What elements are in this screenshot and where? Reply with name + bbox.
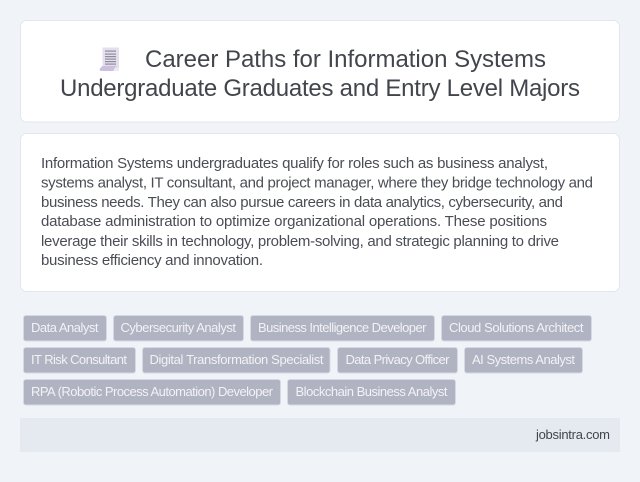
tag: Digital Transformation Specialist [142, 348, 330, 373]
tag: IT Risk Consultant: IT Risk Consultant [31, 352, 127, 367]
text block: description: business efficiency and innovation. [41, 252, 263, 269]
tag: Blockchain Business Analyst: Blockchain Business Analyst [296, 384, 448, 399]
icon: document scroll [100, 48, 119, 71]
tag: Data Analyst: Data Analyst [31, 320, 99, 335]
tag: Business Intelligence Developer [250, 316, 434, 341]
tag list [24, 316, 592, 405]
title: Undergraduate Graduates and Entry Level Majors [60, 75, 580, 102]
footer: jobsintra.com [535, 427, 610, 442]
tag: Cybersecurity Analyst [114, 316, 244, 341]
tag: Blockchain Business Analyst [288, 380, 456, 405]
tag: AI Systems Analyst: AI Systems Analyst [472, 352, 575, 367]
title: Career Paths for Information Systems [145, 46, 546, 73]
text block: description: systems analyst, IT consultant, and project manager, where they bridge technology and [41, 174, 593, 192]
panel: description [20, 134, 620, 292]
tag: RPA Developer: RPA (Robotic Process Automation) Developer [31, 384, 274, 399]
tag: Cloud Solutions Architect: Cloud Solutions Architect [449, 320, 584, 335]
tag: Data Privacy Officer [338, 348, 458, 373]
tag: RPA Developer [24, 380, 280, 405]
tag: Business Intelligence Developer: Business Intelligence Developer [258, 320, 427, 335]
tag: Data Privacy Officer: Data Privacy Officer [346, 352, 450, 367]
tag: Digital Transformation Specialist: Digital Transformation Specialist [150, 352, 324, 367]
tag: AI Systems Analyst [464, 348, 582, 373]
tag: Cloud Solutions Architect [442, 316, 592, 341]
panel: title card [20, 20, 620, 122]
text block: description: leverage their skills in technology, problem-solving, and strategic planning to drive [41, 233, 559, 250]
title [60, 46, 580, 102]
tag: Data Analyst [24, 316, 106, 341]
text block: description [41, 155, 593, 269]
text block: description: database administration to optimize organizational operations. These positions [41, 213, 547, 230]
tag: Cybersecurity Analyst: Cybersecurity Analyst [120, 320, 236, 335]
footer [20, 418, 620, 452]
tag: IT Risk Consultant [24, 348, 136, 373]
text block: description: business needs. They can also pursue careers in data analytics, cybersecurity, and [41, 194, 563, 211]
text block: description: Information Systems undergraduates qualify for roles such as business analyst, [41, 155, 548, 172]
